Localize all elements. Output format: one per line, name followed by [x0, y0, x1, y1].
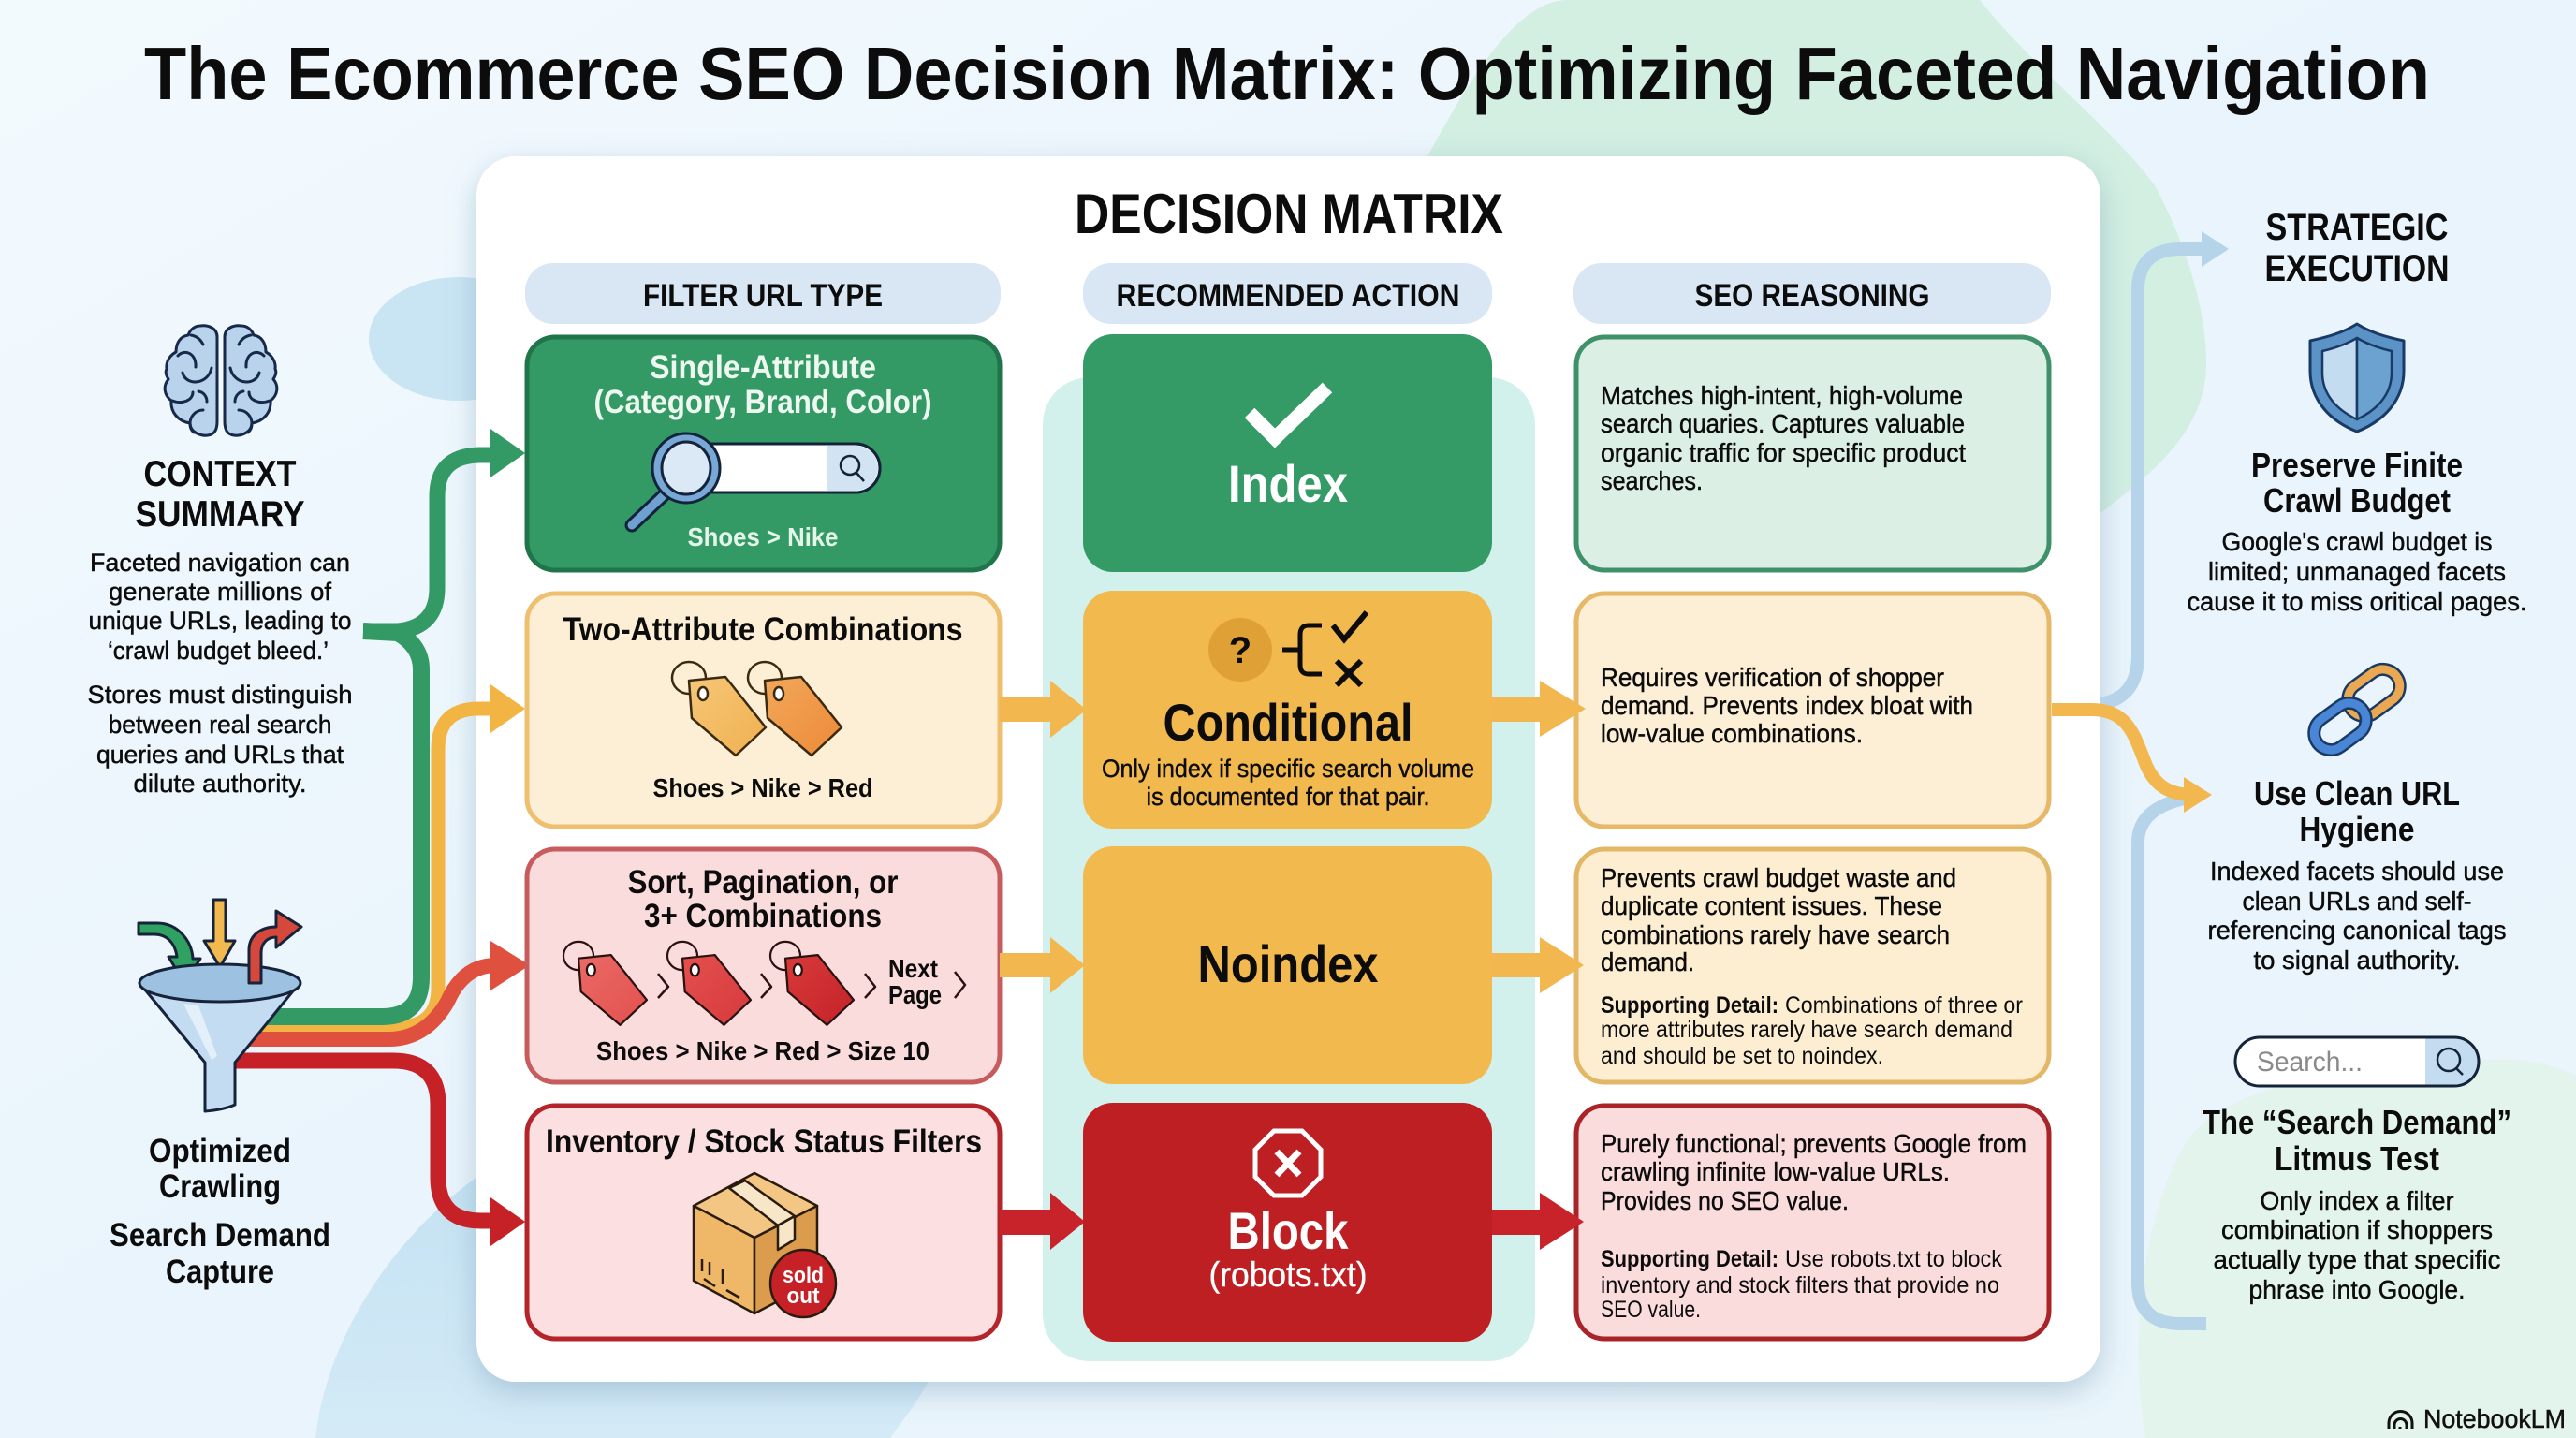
icon: question with branching outcomes: ? [1229, 630, 1251, 671]
text: preserve finite crawl budget: limited; unmanaged facets [2208, 557, 2506, 586]
text: faceted navigation: Faceted navigation can [90, 549, 350, 577]
action: block: (robots.txt) [1209, 1255, 1367, 1294]
row 2 filter: two attribute: Shoes > Nike > Red [653, 773, 872, 802]
reasoning: noindex: combinations rarely have search [1601, 920, 1950, 949]
reasoning: conditional: demand. Prevents index bloat with [1601, 691, 1973, 720]
column header: seo reasoning [1573, 263, 2051, 324]
text: stores must distinguish: queries and URLs that [96, 741, 344, 769]
action: conditional: is documented for that pair. [1146, 783, 1430, 811]
supporting detail: block: inventory and stock filters that provide no [1601, 1272, 1999, 1299]
text: search demand litmus test: Litmus Test [2275, 1139, 2439, 1178]
text: faceted navigation: ‘crawl budget bleed.’ [108, 637, 329, 665]
text: preserve finite crawl budget: Preserve Finite [2251, 446, 2463, 484]
reasoning: block: Purely functional; prevents Google from [1601, 1129, 2027, 1158]
text: use clean url hygiene: Hygiene [2299, 810, 2415, 848]
action: conditional [1083, 591, 1492, 829]
column header: filter url type: FILTER URL TYPE [643, 278, 883, 314]
text: stores must distinguish: between real search [109, 711, 331, 739]
column header: recommended action: RECOMMENDED ACTION [1116, 278, 1460, 314]
icon: chain link [2307, 663, 2407, 756]
reasoning: noindex: Prevents crawl budget waste and [1601, 863, 1956, 892]
panel: strategic execution [2187, 207, 2527, 1304]
arrow: blue lower bracket [2138, 797, 2206, 1324]
text: use clean url hygiene: Use Clean URL [2254, 774, 2460, 813]
row 2 filter: two attribute: Two-Attribute Combinations [564, 611, 962, 648]
arrow: green into funnel [139, 923, 200, 983]
badge: sold out: sold [783, 1263, 824, 1288]
text: stores must distinguish: dilute authority. [133, 770, 307, 798]
icon: red price tags chain [564, 942, 965, 1025]
text: search demand litmus test: The “Search Demand” [2203, 1103, 2511, 1141]
action: conditional: Conditional [1163, 693, 1413, 752]
column header: filter url type [525, 263, 1001, 324]
action: conditional: Only index if specific search volume [1102, 755, 1474, 783]
arrow: conditional to reasoning [1492, 681, 1586, 737]
action: index [1083, 334, 1492, 572]
icon: funnel with sorted arrows [139, 900, 301, 1111]
text: use clean url hygiene: Indexed facets should use [2210, 857, 2504, 886]
text: faceted navigation [88, 549, 352, 665]
supporting detail: block: Supporting Detail: [1601, 1246, 1778, 1272]
text: search demand litmus test: phrase into Google. [2248, 1275, 2466, 1304]
row 3 filter: sort and pagination: Sort, Pagination, or [627, 864, 899, 901]
reasoning: index [1576, 337, 2049, 570]
arrow: yellow to clean url hygiene [2052, 710, 2212, 813]
row 3 filter: sort and pagination: Shoes > Nike > Red > Size 10 [596, 1036, 929, 1065]
reasoning: block: crawling infinite low-value URLs. [1601, 1157, 1950, 1186]
reasoning: index: organic traffic for specific product [1601, 438, 1966, 467]
text: outcomes: Optimized [149, 1133, 291, 1169]
icon: search box: Search... [2257, 1047, 2363, 1078]
reasoning: noindex [1576, 849, 2049, 1082]
panel: context summary [88, 326, 352, 798]
text: outcomes [110, 1133, 330, 1290]
matrix heading: DECISION MATRIX [1075, 183, 1503, 245]
reasoning: conditional: low-value combinations. [1601, 719, 1863, 748]
row 2 filter: two attribute [527, 594, 1000, 827]
action: block [1083, 1103, 1492, 1342]
text: next page [888, 954, 942, 1009]
action: index: Index [1228, 454, 1348, 513]
badge: sold out: out [786, 1284, 820, 1309]
text: preserve finite crawl budget: Google's crawl budget is [2222, 527, 2492, 556]
text: outcomes: Search Demand [110, 1217, 330, 1254]
row 4 filter: inventory [527, 1106, 1000, 1339]
supporting detail: noindex: Combinations of three or [1785, 992, 2023, 1019]
column header: recommended action [1083, 263, 1492, 324]
text: faceted navigation: unique URLs, leading to [88, 607, 352, 635]
heading: context summary [135, 454, 305, 535]
text: outcomes: Capture [166, 1254, 274, 1290]
text: preserve finite crawl budget [2187, 446, 2527, 616]
text: preserve finite crawl budget: cause it to miss oritical pages. [2187, 587, 2527, 616]
reasoning: conditional: Requires verification of shopper [1601, 663, 1944, 692]
arrow: blue up to strategic execution [2100, 231, 2229, 704]
icon: question with branching outcomes [1208, 612, 1367, 685]
supporting detail: block: SEO value. [1601, 1297, 1701, 1323]
supporting detail: noindex: more attributes rarely have search demand [1601, 1017, 2012, 1043]
text: stores must distinguish: Stores must distinguish [88, 681, 352, 709]
arrow: row 3 filter to action [1000, 937, 1085, 993]
arrow: yellow flow to two-attribute row [243, 684, 525, 1027]
panel: decision matrix background [476, 156, 2100, 1382]
text: faceted navigation: generate millions of [109, 578, 331, 606]
text: next page: Page [888, 980, 942, 1009]
icon: brain [165, 326, 277, 435]
text: use clean url hygiene: clean URLs and self- [2243, 887, 2471, 916]
arrow: row 2 filter to action [1000, 681, 1087, 738]
heading: strategic execution: STRATEGIC [2265, 207, 2449, 248]
icon: stop octagon [1255, 1131, 1321, 1196]
arrow: dark red flow to inventory row [229, 1061, 525, 1246]
supporting detail: noindex [1601, 992, 2023, 1069]
text: outcomes: Crawling [159, 1168, 281, 1205]
action: block: Block [1228, 1201, 1349, 1260]
icon: shield [2310, 324, 2404, 432]
row 1 filter: single attribute: (Category, Brand, Color) [593, 384, 932, 420]
text: stores must distinguish [88, 681, 352, 798]
reasoning: block [1576, 1106, 2049, 1339]
reasoning: noindex: demand. [1601, 947, 1694, 976]
reasoning: conditional [1576, 594, 2049, 827]
arrow: red out of funnel [249, 911, 301, 983]
reasoning: index: searches. [1601, 466, 1703, 495]
arrow: green flow to single-attribute row [243, 429, 525, 1017]
text: next page: Next [888, 954, 938, 983]
icon: check mark [1250, 388, 1327, 438]
icon: orange price tags [672, 662, 842, 756]
row 3 filter: sort and pagination [527, 849, 1000, 1082]
arrow: row 4 filter to action [1000, 1193, 1085, 1250]
text: search demand litmus test: actually type that specific [2213, 1245, 2501, 1274]
flow lines from funnel to filter rows [229, 429, 530, 1246]
column header: seo reasoning: SEO REASONING [1694, 278, 1930, 314]
row 1 filter: single attribute: Shoes > Nike [687, 522, 839, 551]
badge: sold out [770, 1250, 836, 1317]
text: use clean url hygiene [2207, 774, 2507, 975]
heading: context summary: SUMMARY [135, 494, 305, 535]
notebooklm logo: NotebookLM [2423, 1404, 2566, 1433]
reasoning: block: Provides no SEO value. [1601, 1186, 1849, 1215]
text: search demand litmus test: Only index a filter [2260, 1186, 2454, 1215]
teal action column band [1043, 377, 1535, 1361]
action: noindex: Noindex [1198, 934, 1378, 993]
icon: cardboard box sold out [694, 1173, 836, 1317]
supporting detail: block: Use robots.txt to block [1785, 1246, 2002, 1272]
row 1 filter: single attribute: Single-Attribute [650, 349, 876, 386]
row 4 filter: inventory: Inventory / Stock Status Filters [546, 1123, 982, 1160]
icon: magnifier over search bar [632, 433, 880, 525]
text: preserve finite crawl budget: Crawl Budget [2263, 481, 2451, 520]
supporting detail: noindex: and should be set to noindex. [1601, 1043, 1883, 1069]
reasoning: noindex: duplicate content issues. These [1601, 891, 1942, 920]
text: search demand litmus test [2203, 1103, 2511, 1304]
heading: context summary: CONTEXT [144, 454, 297, 494]
arrow: block to reasoning [1492, 1193, 1584, 1250]
heading: strategic execution [2265, 207, 2449, 289]
reasoning: index: search quaries. Captures valuable [1601, 409, 1965, 438]
arrow: noindex to reasoning [1492, 937, 1584, 993]
text: use clean url hygiene: to signal authority. [2254, 946, 2460, 975]
text: use clean url hygiene: referencing canonical tags [2207, 916, 2507, 945]
arrow: light red flow to sort and pagination row [234, 941, 530, 1039]
action: noindex [1083, 846, 1492, 1084]
supporting detail: noindex: Supporting Detail: [1601, 992, 1778, 1019]
supporting detail: block [1601, 1246, 2002, 1323]
funnel body [139, 964, 300, 1111]
reasoning: index: Matches high-intent, high-volume [1601, 381, 1963, 410]
title: The Ecommerce SEO Decision Matrix: Optimizing Faceted Navigation [144, 32, 2430, 115]
text: search demand litmus test: combination if shoppers [2221, 1215, 2493, 1244]
row 1 filter: single attribute [527, 337, 1000, 570]
icon: search box [2235, 1037, 2479, 1086]
row 3 filter: sort and pagination: 3+ Combinations [644, 898, 882, 934]
heading: strategic execution: EXECUTION [2265, 248, 2449, 289]
arrow: yellow into funnel [204, 900, 235, 967]
